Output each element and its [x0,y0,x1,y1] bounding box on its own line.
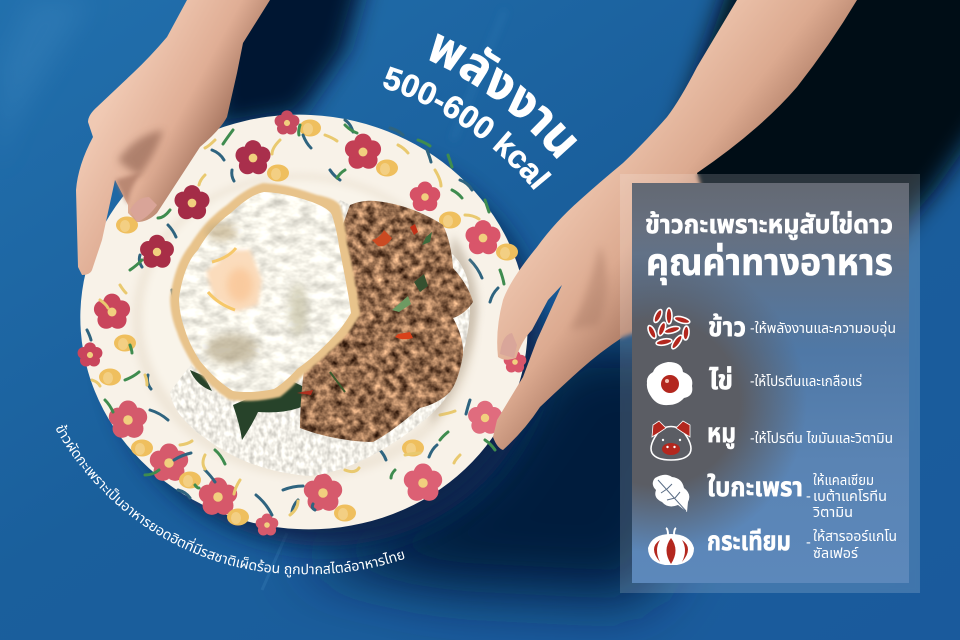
panel: outer frosted frame [620,174,920,593]
plate [53,86,555,558]
food shadow on plate [430,235,478,425]
plate flowers [78,110,526,535]
plate shadow [110,146,542,546]
item: garlic: กระเทียม [707,526,791,556]
item: garlic [707,526,897,562]
icon: pig [651,421,691,460]
item: basil [707,472,887,521]
item: pork: -ให้โปรตีน ไขมันและวิตามิน [750,431,893,447]
item: egg: -ให้โปรตีนและเกลือแร่ [750,373,862,390]
icon: garlic [648,528,694,565]
icon: rice grains [646,308,691,350]
item: garlic: ซัลเฟอร์ [813,546,859,562]
item: pork: หมู [707,418,736,449]
item: egg [709,365,862,395]
item: rice: ข้าว [708,312,746,342]
plate brush strokes [87,120,510,515]
fried egg [170,183,360,401]
item: egg: ไข่ [709,365,733,395]
icon: basil leaf [653,475,689,512]
panel: inner frosted card [632,183,909,583]
item: rice: -ให้พลังงานและความอบอุ่น [750,320,896,337]
hand: right with arm [493,0,857,450]
item: basil: ให้แคลเซียม [813,473,874,489]
item: basil: วิตามิน [812,505,853,521]
item: garlic: ให้สารออร์แกโน [813,529,897,545]
caption along plate: ข้าวผัดกะเพราะเป็นอาหารยอดฮิตที่มีรสชาติเผ็ดร้อน ถูกปากสไตล์อาหารไทย [56,424,404,578]
item: rice [708,312,896,342]
item: pork [707,418,893,449]
item: basil: ใบกะเพรา [707,472,803,502]
plate tulips [99,120,518,526]
panel title [645,209,893,285]
item: basil: เบต้าแคโรทีน [813,489,887,505]
basil leaves [190,370,320,440]
minced pork [297,201,473,442]
icon: fried egg [647,362,692,405]
energy value: 500-600 kcal [383,66,552,190]
item: basil: - [806,489,811,505]
heading: energy: พลังงาน [429,33,578,159]
item: garlic: - [806,535,811,551]
panel title: คุณค่าทางอาหาร [646,242,893,285]
hand: left [76,0,270,275]
rice [170,200,470,476]
panel title: ข้าวกะเพราะหมูสับไข่ดาว [645,209,893,240]
